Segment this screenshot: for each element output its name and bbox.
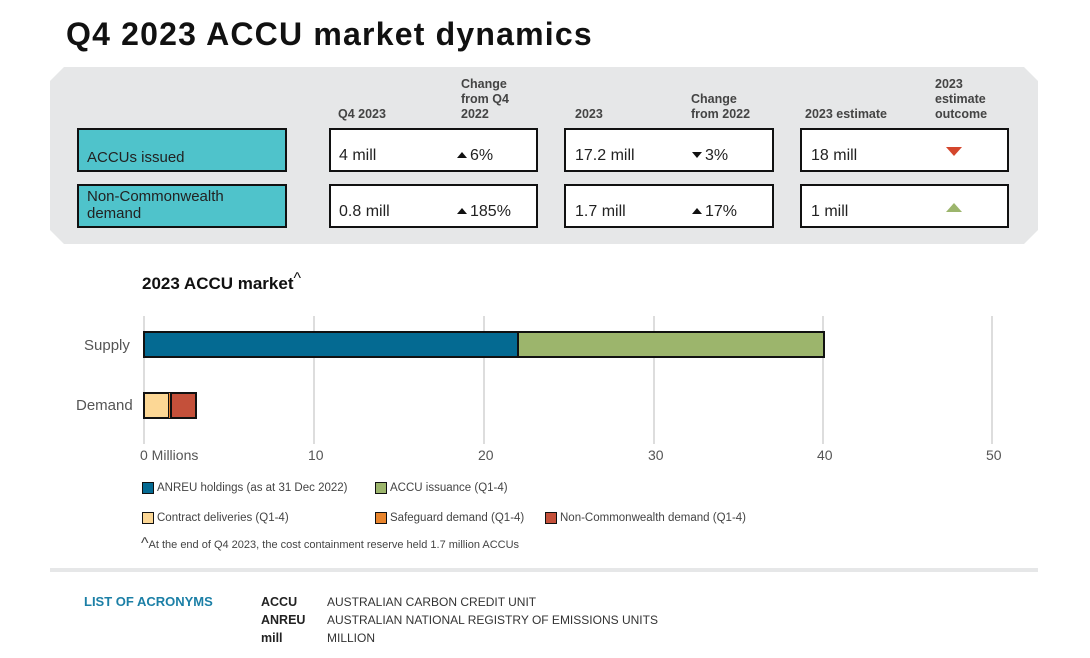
row label: ACCUs issued [77, 128, 287, 172]
acronyms section: MILLION [327, 631, 375, 645]
acronyms section: AUSTRALIAN NATIONAL REGISTRY OF EMISSIONS UNITS [327, 613, 658, 627]
panel: summary table [50, 67, 1038, 244]
row 2 estimate box [800, 184, 1009, 228]
row 2 2023 box: 1.7 mill [575, 203, 626, 220]
row 1 2023 box [564, 128, 774, 172]
row 2 estimate box: 1 mill [811, 203, 848, 220]
legend: ACCU issuance (Q1-4) [390, 482, 508, 494]
acronyms section: ACCU [261, 595, 297, 609]
column headers: Change [691, 92, 737, 106]
legend: Safeguard demand (Q1-4) [390, 512, 524, 524]
bar chart: 20 [478, 447, 494, 463]
acronyms section: LIST OF ACRONYMS [84, 594, 213, 609]
bar chart: 0 Millions [140, 447, 198, 463]
row 2 2023 box: 17% [705, 203, 737, 220]
bar chart: Supply [84, 337, 130, 354]
column headers [338, 77, 987, 121]
row 1 Q4 box: 4 mill [339, 147, 376, 164]
row label: Non-Commonwealth demand [77, 184, 287, 228]
acronyms section: AUSTRALIAN CARBON CREDIT UNIT [327, 595, 536, 609]
title: Q4 2023 ACCU market dynamics [66, 16, 593, 52]
column headers: from 2022 [691, 107, 750, 121]
column headers: Q4 2023 [338, 107, 386, 121]
column headers: 2023 estimate [805, 107, 887, 121]
bar chart: 10 [308, 447, 324, 463]
legend: Contract deliveries (Q1-4) [157, 512, 289, 524]
column headers: 2023 [575, 107, 603, 121]
column headers: Change [461, 77, 507, 91]
acronyms section: ANREU [261, 613, 305, 627]
column headers: 2023 [935, 77, 963, 91]
bar chart: 50 [986, 447, 1002, 463]
footnote: ^At the end of Q4 2023, the cost containment reserve held 1.7 million ACCUs [141, 535, 519, 552]
acronyms section [84, 594, 658, 645]
bar chart: 30 [648, 447, 664, 463]
legend: Non-Commonwealth demand (Q1-4) [560, 512, 746, 524]
acronyms section: mill [261, 631, 283, 645]
column headers: 2022 [461, 107, 489, 121]
bar chart: 40 [817, 447, 833, 463]
row 1 estimate box: 18 mill [811, 147, 857, 164]
bar chart [76, 316, 1002, 463]
row 2 2023 box [564, 184, 774, 228]
column headers: outcome [935, 107, 987, 121]
legend [142, 482, 746, 524]
row 1 Q4 box: 6% [470, 147, 493, 164]
column headers: estimate [935, 92, 986, 106]
row 2 Q4 box: 185% [470, 203, 511, 220]
row 1 Q4 box [329, 128, 538, 172]
row 1 2023 box: 17.2 mill [575, 147, 635, 164]
chart title: 2023 ACCU market^ [142, 270, 301, 293]
row 2 Q4 box: 0.8 mill [339, 203, 390, 220]
legend: ANREU holdings (as at 31 Dec 2022) [157, 482, 348, 494]
row label: Non-Commonwealth demand: Non-Commonwealth [87, 188, 224, 205]
row 2 Q4 box [329, 184, 538, 228]
row label: Non-Commonwealth demand: demand [87, 205, 141, 222]
column headers: from Q4 [461, 92, 509, 106]
row 1 2023 box: 3% [705, 147, 728, 164]
row label: ACCUs issued: ACCUs issued [87, 149, 185, 166]
row 1 estimate box [800, 128, 1009, 172]
bar chart: Demand [76, 397, 133, 414]
